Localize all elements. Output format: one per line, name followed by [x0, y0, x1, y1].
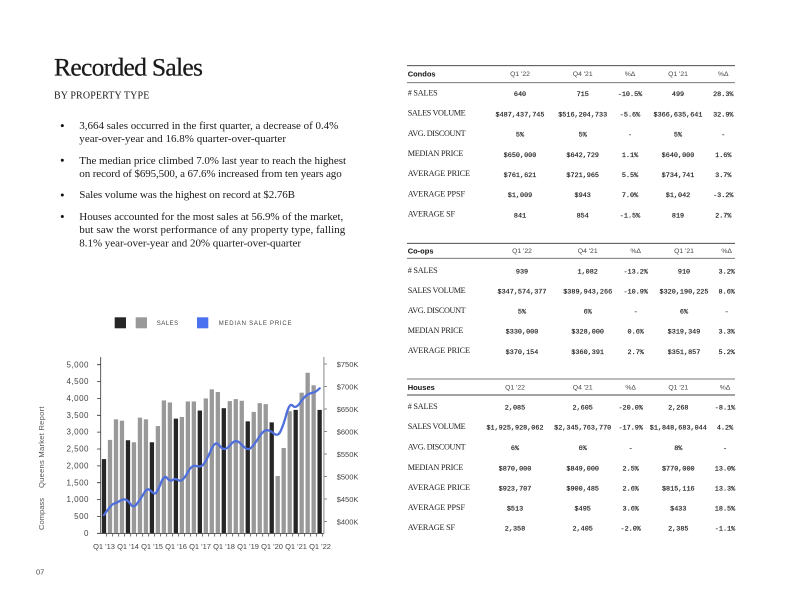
right axis labels: $600K — [337, 427, 358, 436]
condos row: discount: - — [721, 132, 725, 140]
houses row: discount: - — [629, 445, 633, 453]
vertical footer: report name — [37, 406, 46, 530]
x axis labels: Q1 '20 — [261, 542, 283, 551]
chart legend: SALES — [157, 321, 178, 327]
co-ops row: average: $370,154 — [506, 349, 538, 357]
bullet: median price: The median price climbed 7.0% last year to reach the highest — [79, 155, 346, 167]
condos row: ppsf — [408, 189, 734, 200]
chart legend: MEDIAN SALE PRICE — [219, 321, 292, 327]
table: co-ops — [407, 243, 736, 357]
co-ops row: median: $319,349 — [668, 329, 700, 337]
co-ops row: average: $360,391 — [571, 349, 604, 357]
left axis labels: 4,000 — [66, 394, 89, 403]
houses row: sales: 2,268 — [668, 404, 689, 412]
houses header: Q1 '22 — [505, 385, 525, 392]
condos row: sales: 28.3% — [713, 91, 734, 99]
houses row: discount — [408, 442, 727, 453]
houses row: median: $770,000 — [662, 465, 695, 473]
left axis labels: 3,500 — [66, 411, 89, 420]
co-ops row: volume: $320,190,225 — [660, 288, 708, 296]
condos row: volume: 32.9% — [713, 111, 734, 119]
combo chart: sales bars and median sale price line — [66, 357, 358, 551]
co-ops header: Q4 '21 — [578, 248, 598, 255]
bullet: sales count — [61, 120, 338, 145]
houses row: sf: AVERAGE SF — [408, 523, 455, 532]
bullet: houses — [61, 211, 346, 249]
condos row: sf: AVERAGE SF — [408, 210, 455, 218]
houses row: sf: -2.0% — [620, 526, 642, 534]
houses row: average: $900,485 — [566, 485, 599, 493]
condos row: median — [408, 149, 732, 160]
houses row: ppsf: $513 — [507, 506, 523, 514]
condos row: average: 3.7% — [715, 172, 732, 180]
co-ops row: volume: -10.9% — [623, 288, 649, 296]
condos row: ppsf: $1,009 — [508, 192, 532, 200]
co-ops header: Co-ops — [408, 246, 434, 256]
co-ops row: discount: AVG. DISCOUNT — [408, 306, 466, 315]
houses row: discount: AVG. DISCOUNT — [408, 442, 466, 451]
co-ops row: discount: 6% — [680, 309, 689, 317]
x axis labels: Q1 '13 — [93, 542, 115, 551]
houses row: discount: 6% — [511, 445, 520, 453]
condos row: average: $721,965 — [566, 172, 599, 180]
condos row: ppsf: $943 — [575, 192, 591, 200]
co-ops row: sales: 910 — [678, 268, 690, 276]
condos row: ppsf: AVERAGE PPSF — [408, 189, 465, 198]
bullet: median price — [61, 155, 346, 180]
left axis labels: 500 — [74, 512, 89, 521]
x axis labels: Q1 '17 — [189, 542, 211, 551]
condos row: discount: AVG. DISCOUNT — [408, 129, 466, 138]
condos row: average: $761,621 — [504, 172, 536, 180]
left axis labels: 1,000 — [66, 495, 89, 504]
houses row: average: $923,707 — [499, 485, 531, 493]
co-ops row: discount: - — [725, 309, 729, 317]
left axis labels: 3,000 — [66, 428, 89, 437]
condos row: ppsf: 7.0% — [622, 192, 639, 200]
condos row: median: 1.1% — [622, 152, 639, 160]
houses row: ppsf: $433 — [670, 506, 686, 514]
condos row: volume: SALES VOLUME — [408, 109, 466, 118]
x axis labels: Q1 '14 — [117, 542, 139, 551]
condos row: sales: 715 — [577, 91, 589, 99]
houses row: volume: $1,925,928,062 — [486, 425, 544, 433]
condos header: %Δ — [625, 71, 636, 78]
co-ops row: volume: $347,574,377 — [498, 288, 546, 296]
bullet: sales count: year-over-year and 16.8% quarter-over-quarter — [79, 133, 286, 145]
condos row: median: $642,729 — [566, 152, 599, 160]
houses row: sf: 2,385 — [668, 526, 689, 534]
houses row: sf: -1.1% — [715, 526, 736, 534]
condos row: discount: 5% — [516, 132, 525, 140]
houses row: volume: 4.2% — [717, 425, 734, 433]
left axis labels — [66, 360, 89, 538]
houses row: volume: SALES VOLUME — [408, 422, 466, 431]
co-ops header: Q1 '22 — [512, 248, 532, 255]
condos row: discount — [408, 129, 725, 140]
condos row: sf — [408, 210, 732, 220]
houses header: %Δ — [625, 385, 636, 392]
x axis labels: Q1 '15 — [141, 542, 163, 551]
condos row: discount: - — [628, 132, 632, 140]
condos row: average: $734,741 — [662, 172, 694, 180]
right axis labels: $550K — [337, 450, 358, 459]
houses row: sf: 2,405 — [572, 526, 593, 534]
x axis labels: Q1 '22 — [309, 542, 331, 551]
condos row: median: 1.6% — [715, 152, 732, 160]
co-ops row: sales: -13.2% — [623, 268, 649, 276]
houses row: median: 2.5% — [623, 465, 640, 473]
right axis labels: $700K — [337, 382, 358, 391]
condos row: ppsf: $1,042 — [666, 192, 690, 200]
houses row: sf: 2,358 — [505, 526, 525, 534]
houses row: sales: # SALES — [408, 402, 438, 411]
right axis labels: $400K — [337, 517, 358, 526]
houses row: median — [408, 463, 736, 473]
houses row: ppsf: 18.5% — [715, 506, 736, 514]
condos row: average: AVERAGE PRICE — [408, 169, 470, 178]
houses row: discount: - — [723, 445, 727, 453]
left axis labels: 4,500 — [66, 377, 89, 386]
x axis labels: Q1 '18 — [213, 542, 235, 551]
left axis labels: 2,000 — [66, 462, 89, 470]
houses row: ppsf: 3.6% — [623, 506, 640, 514]
houses row: average: AVERAGE PRICE — [408, 483, 470, 492]
condos row: sales: # SALES — [408, 88, 438, 98]
condos row: volume — [408, 109, 734, 119]
condos row: sf: 819 — [672, 212, 684, 220]
x axis labels: Q1 '16 — [165, 542, 187, 551]
condos header: Q1 '21 — [668, 71, 688, 78]
houses row: sales: -8.1% — [715, 404, 736, 412]
condos row: median: MEDIAN PRICE — [408, 149, 463, 158]
right axis labels: $450K — [337, 495, 358, 504]
left axis labels: 1,500 — [66, 478, 89, 487]
houses header: Houses — [408, 383, 435, 392]
houses header: %Δ — [720, 385, 731, 392]
left axis labels: 5,000 — [66, 360, 89, 369]
right axis labels — [337, 360, 358, 526]
bullet: houses: Houses accounted for the most sales at 56.9% of the market, — [79, 211, 344, 223]
co-ops header: Q1 '21 — [674, 248, 694, 255]
co-ops row: median: $328,000 — [571, 329, 604, 337]
houses header: Q4 '21 — [573, 385, 593, 392]
houses row: volume: $1,848,683,044 — [650, 425, 707, 433]
houses row: median: $849,000 — [566, 465, 599, 473]
houses row: median: MEDIAN PRICE — [408, 463, 463, 472]
bullet: sales volume: Sales volume was the highest on record at $2.76B — [79, 189, 295, 201]
houses row: sales — [408, 402, 736, 412]
co-ops header: %Δ — [721, 248, 732, 255]
houses header: Q1 '21 — [668, 385, 688, 392]
median sale price line — [104, 388, 320, 515]
right axis labels: $650K — [337, 405, 358, 414]
co-ops row: average: $351,857 — [668, 349, 700, 357]
subtitle: BY PROPERTY TYPE — [54, 91, 149, 102]
condos row: sf: 2.7% — [715, 212, 732, 220]
condos header — [408, 70, 729, 79]
co-ops row: sales: 1,082 — [577, 268, 598, 276]
condos row: discount: 5% — [674, 132, 683, 140]
co-ops row: discount: 5% — [518, 309, 527, 317]
condos row: sales — [408, 88, 734, 99]
condos header: Q4 '21 — [573, 71, 593, 78]
title: Recorded Sales — [54, 52, 203, 82]
co-ops row: discount — [408, 306, 729, 317]
houses row: volume: $2,345,763,770 — [554, 425, 611, 433]
condos header: Condos — [408, 70, 436, 79]
chart legend — [115, 317, 292, 328]
co-ops row: volume: 8.6% — [719, 288, 736, 296]
bullet: houses: but saw the worst performance of any property type, falling — [79, 224, 346, 236]
houses row: sales: 2,605 — [572, 404, 593, 412]
bullet: sales count: 3,664 sales occurred in the first quarter, a decrease of 0.4% — [79, 120, 338, 132]
houses row: discount: 6% — [579, 445, 588, 453]
condos row: volume: $366,635,641 — [654, 111, 702, 119]
x axis labels — [93, 542, 331, 551]
bullet: houses: 8.1% year-over-year and 20% quarter-over-quarter — [79, 237, 301, 249]
condos header: %Δ — [718, 71, 729, 78]
condos row: sales: -10.5% — [618, 91, 643, 99]
co-ops row: sales — [408, 266, 736, 276]
condos row: sales: 640 — [514, 91, 526, 99]
co-ops row: average: 5.2% — [719, 349, 736, 357]
table: houses — [407, 379, 736, 534]
condos row: volume: $487,437,745 — [496, 111, 544, 119]
houses row: average: $815,116 — [662, 485, 695, 493]
condos row: ppsf: -3.2% — [713, 192, 734, 200]
condos row: sf: 854 — [577, 212, 589, 220]
houses row: volume — [408, 422, 734, 433]
condos row: sales: 499 — [672, 91, 684, 99]
right axis labels: $500K — [337, 472, 358, 481]
co-ops row: sales: # SALES — [408, 266, 438, 275]
x axis labels: Q1 '19 — [237, 542, 259, 551]
co-ops row: median: 3.3% — [719, 329, 736, 337]
houses row: average: 2.6% — [623, 485, 640, 493]
co-ops header — [408, 246, 732, 256]
houses row: volume: -17.9% — [618, 425, 644, 433]
condos row: average — [408, 169, 732, 180]
condos row: average: 5.5% — [622, 172, 639, 180]
houses row: ppsf: $495 — [575, 506, 591, 514]
co-ops row: average: AVERAGE PRICE — [408, 346, 470, 355]
houses row: discount: 8% — [674, 445, 683, 453]
left axis labels: 0 — [84, 529, 89, 538]
condos row: volume: $516,204,733 — [558, 111, 607, 119]
co-ops row: median: MEDIAN PRICE — [408, 326, 463, 335]
right axis labels: $750K — [337, 360, 358, 369]
houses row: sf — [408, 523, 736, 534]
condos row: volume: -5.6% — [620, 111, 641, 119]
co-ops row: discount: - — [634, 309, 638, 317]
houses row: average: 13.3% — [715, 485, 736, 493]
houses row: average — [408, 483, 736, 493]
condos header: Q1 '22 — [510, 71, 530, 78]
houses row: sales: -20.0% — [618, 404, 644, 412]
houses row: ppsf: AVERAGE PPSF — [408, 503, 465, 512]
co-ops row: median — [408, 326, 736, 337]
bullet: median price: on record of $695,500, a 67.6% increased from ten years ago — [79, 168, 342, 180]
houses header — [408, 383, 731, 392]
co-ops row: median: $330,000 — [506, 329, 538, 337]
houses row: median: $870,000 — [499, 465, 531, 473]
vertical footer: report name: Compass — [37, 498, 46, 530]
sales bars — [102, 373, 322, 533]
co-ops row: volume: $389,943,266 — [563, 288, 612, 296]
x axis labels: Q1 '21 — [285, 542, 307, 551]
condos row: sf: -1.5% — [620, 212, 641, 220]
left axis labels: 2,500 — [66, 445, 89, 454]
co-ops row: average: 2.7% — [628, 349, 645, 357]
bullet list — [61, 120, 346, 249]
co-ops row: volume — [408, 286, 736, 296]
condos row: median: $650,000 — [504, 152, 536, 160]
vertical footer: report name: Queens Market Report — [37, 406, 46, 488]
co-ops row: discount: 6% — [584, 309, 593, 317]
condos row: sf: 841 — [514, 212, 526, 220]
condos row: discount: 5% — [579, 132, 588, 140]
page number: 07 — [36, 568, 44, 576]
houses row: median: 13.0% — [715, 465, 736, 473]
co-ops row: median: 0.6% — [628, 329, 645, 337]
co-ops row: average — [408, 346, 736, 357]
co-ops row: sales: 939 — [516, 268, 528, 276]
houses row: sales: 2,085 — [505, 404, 525, 412]
co-ops row: volume: SALES VOLUME — [408, 286, 466, 295]
co-ops row: sales: 3.2% — [719, 268, 736, 276]
table: condos — [407, 66, 735, 220]
condos row: median: $640,000 — [662, 152, 694, 160]
houses row: ppsf — [408, 503, 736, 514]
co-ops header: %Δ — [630, 248, 641, 255]
